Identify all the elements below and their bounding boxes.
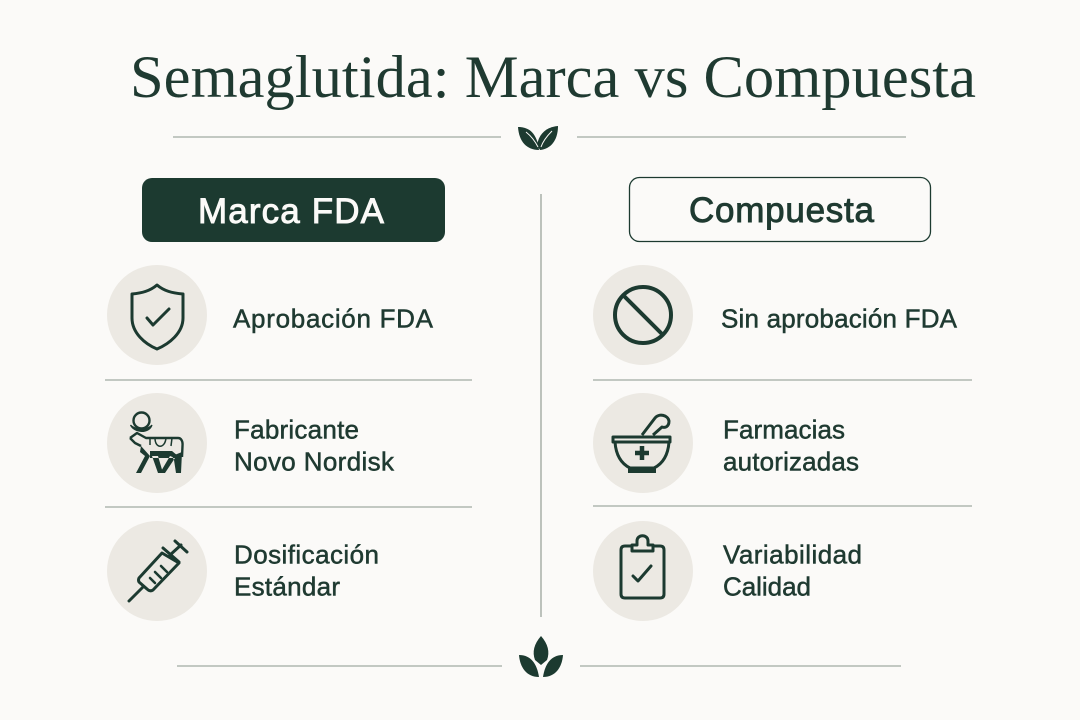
- label: Farmacias autorizadas: Farmacias: [723, 414, 845, 444]
- panel: Sin aprobación row: [593, 265, 958, 365]
- label: Farmacias autorizadas: [723, 414, 859, 476]
- button: Compuesta: [630, 178, 930, 242]
- label: Sin aprobación FDA: Sin aprobación FDA: [721, 304, 958, 334]
- label: Variabilidad Calidad: [723, 540, 862, 602]
- button: Marca FDA: Marca FDA: [198, 192, 385, 231]
- label: Fabricante Novo Nordisk: [234, 414, 395, 476]
- label: Farmacias autorizadas: autorizadas: [723, 446, 859, 476]
- panel: Fabricante row: [107, 393, 395, 493]
- icon: top leaves: [518, 126, 558, 150]
- icon: clipboard: [621, 536, 664, 598]
- title: Semaglutida: Marca vs Compuesta: [130, 44, 976, 111]
- icon: bottom leaves: [519, 636, 563, 677]
- panel: Dosificación row: [107, 521, 379, 621]
- icon: prohibited: [615, 287, 671, 343]
- panel: Variabilidad row: [593, 521, 862, 621]
- icon: mortar and pestle: [613, 415, 670, 473]
- label: Dosificación Estándar: [234, 540, 379, 602]
- label: Variabilidad Calidad: Variabilidad: [723, 540, 862, 570]
- label: Aprobación FDA: Aprobación FDA: [233, 304, 434, 334]
- panel: Aprobación FDA row: [107, 265, 434, 365]
- panel: Farmacias row: [593, 393, 859, 493]
- icon: shield: [132, 285, 183, 349]
- button: Marca FDA: [142, 178, 445, 242]
- label: Dosificación Estándar: Dosificación: [234, 540, 379, 570]
- label: Fabricante Novo Nordisk: Fabricante: [234, 414, 359, 444]
- label: Fabricante Novo Nordisk: Novo Nordisk: [234, 446, 395, 476]
- button: Compuesta: Compuesta: [689, 191, 875, 230]
- icon: Novo Nordisk bull: [130, 412, 183, 473]
- label: Variabilidad Calidad: Calidad: [723, 572, 811, 602]
- label: Dosificación Estándar: Estándar: [234, 572, 340, 602]
- icon: syringe: [129, 541, 187, 601]
